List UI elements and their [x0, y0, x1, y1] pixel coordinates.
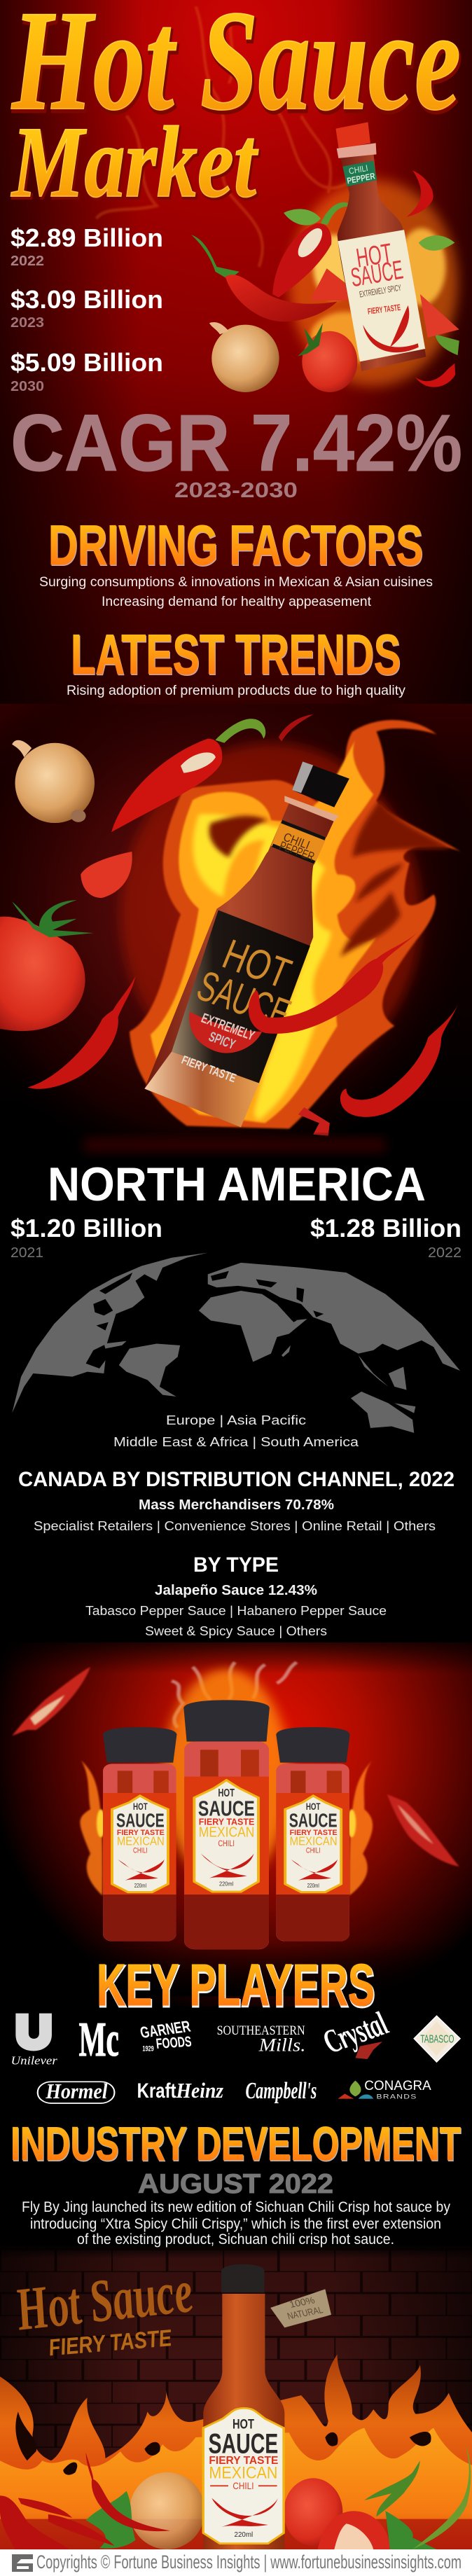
- by type section: Jalapeño Sauce 12.43%: [155, 1583, 317, 1598]
- illustration: red chilies: [0, 2453, 170, 2549]
- illustration: hero bottle: [335, 122, 426, 371]
- bottle: left: FIERY TASTE: [117, 1828, 165, 1837]
- market value stats: $2.89 Billion: [11, 223, 163, 252]
- panel: three bottles illustration: [0, 1642, 472, 2007]
- title: Market: [11, 106, 258, 219]
- illustration: left chili: [28, 976, 136, 1089]
- text: driving factors list: Surging consumptions & innovations in Mexican & Asian cuisines: [39, 575, 433, 590]
- illustration: hero bottle: HOT: [354, 237, 394, 273]
- illustration: hero bottle: EXTREMELY SPICY: [359, 282, 402, 300]
- bottle: center: SAUCE: [198, 1797, 255, 1821]
- market value stats: 2022: [11, 254, 44, 269]
- logo: Crystal: Crystal: [315, 2005, 395, 2060]
- logo: Kraft Heinz: Heinz: [176, 2078, 223, 2103]
- logo: Kraft Heinz: [137, 2078, 223, 2103]
- north america values: 2022: [428, 1245, 461, 1261]
- brand lettering on wall: Hot Sauce: [10, 2257, 198, 2343]
- blurred chili right: [387, 1794, 459, 1867]
- distribution channel section: CANADA BY DISTRIBUTION CHANNEL, 2022: [18, 1468, 454, 1491]
- market value stats: $3.09 Billion: [11, 285, 163, 314]
- bottle: center: HOT: [218, 1787, 235, 1799]
- smoke above bottles: [172, 1662, 297, 1728]
- north america values: [11, 1214, 461, 1261]
- north america values: $1.20 Billion: [11, 1214, 162, 1242]
- text: industry development body: of the existing product, Sichuan chili crisp hot sauce.: [77, 2231, 394, 2248]
- company logos: [11, 2005, 460, 2104]
- tag: 100% natural: [270, 2289, 331, 2327]
- logo: Tabasco: [414, 2016, 460, 2062]
- heading: north america: NORTH AMERICA: [48, 1158, 426, 1211]
- bottle: right: HOT: [306, 1801, 321, 1812]
- illustration: flaming bottle: SAUCE: [190, 962, 297, 1039]
- bottle: right: MEXICAN: [290, 1834, 338, 1848]
- text: driving factors list: Increasing demand for healthy appeasement: [102, 595, 372, 609]
- market value stats: 2023: [11, 315, 44, 331]
- bottle: center: MEXICAN: [199, 1824, 254, 1841]
- brand lettering on wall: [10, 2257, 198, 2361]
- illustration: hero bottle: CHILI: [348, 162, 368, 176]
- logo: Garner Foods: FOODS: [155, 2033, 193, 2052]
- panel: brick wall and flames illustration: [0, 2245, 472, 2550]
- flames: [0, 2355, 472, 2549]
- panel: logos and industry development background: [0, 2009, 472, 2249]
- logo: Garner Foods: GARNER: [138, 2017, 192, 2042]
- blurred chili left: [12, 1667, 90, 1736]
- illustration: hero bottle: SAUCE: [349, 254, 405, 293]
- distribution channel section: Specialist Retailers | Convenience Stores | Online Retail | Others: [34, 1519, 436, 1533]
- logo: Hormel: Hormel: [46, 2079, 108, 2103]
- bottle: left: CHILI: [133, 1846, 148, 1855]
- panel: north america background: [0, 1149, 472, 1646]
- logo: Unilever: Unilever: [11, 2054, 57, 2068]
- illustration: hero hot sauce bottle with chilies: [191, 122, 459, 392]
- bottle: left: HOT: [133, 1801, 148, 1812]
- brand lettering on wall: FIERY TASTE: [47, 2325, 174, 2361]
- other regions: Europe | Asia Pacific: [166, 1413, 306, 1427]
- date: august 2022: AUGUST 2022: [138, 2169, 333, 2199]
- title: [11, 0, 462, 221]
- illustration: flaming bottle: [144, 761, 349, 1128]
- illustration: cut chili: [111, 719, 265, 832]
- illustration: right chili across bottle: [249, 931, 419, 1034]
- illustration: whole tomato: [0, 900, 93, 1031]
- logo: Conagra Brands: BRANDS: [377, 2093, 416, 2100]
- CAGR callout: 2023-2030: [174, 478, 298, 502]
- bottle: left: MEXICAN: [117, 1834, 165, 1848]
- illustration: ingredients bottle: 220ml: [235, 2531, 253, 2539]
- north america values: 2021: [11, 1245, 43, 1261]
- illustration: tomato wedge: [81, 852, 132, 898]
- illustration: greens: [86, 2444, 471, 2549]
- by type section: Sweet & Spicy Sauce | Others: [145, 1624, 327, 1638]
- tag: 100% natural: 100%: [288, 2295, 317, 2310]
- illustration: ingredients bottle: FIERY TASTE: [209, 2453, 278, 2466]
- logo: Conagra Brands: [338, 2078, 431, 2100]
- flames behind bottle: [120, 720, 461, 1129]
- illustration: onion: [130, 2472, 204, 2549]
- illustration: ingredients bottle: MEXICAN: [209, 2463, 277, 2482]
- illustration: tomatoes: [284, 2478, 390, 2549]
- illustration: flaming bottle: FIERY TASTE: [180, 1053, 238, 1085]
- company logos: Mc: [79, 2012, 119, 2067]
- by type section: Tabasco Pepper Sauce | Habanero Pepper Sauce: [85, 1604, 387, 1618]
- bottle: right: SAUCE: [289, 1810, 338, 1831]
- tag: 100% natural: NATURAL: [286, 2305, 324, 2322]
- logo: Fortune Business Insights: [12, 2554, 33, 2572]
- logo: Campbell's: Campbell's: [245, 2078, 317, 2104]
- illustration: flaming bottle: EXTREMELY: [199, 1011, 257, 1044]
- illustration: ingredients bottle: [203, 2264, 284, 2549]
- bottle: left: SAUCE: [116, 1810, 165, 1831]
- logo: Southeastern Mills: [217, 2023, 305, 2055]
- logo: Kraft Heinz: Kraft: [137, 2079, 176, 2103]
- bottle: left: [103, 1727, 176, 1941]
- title: Market: [11, 106, 258, 219]
- illustration: flaming bottle: PEPPER: [277, 838, 317, 864]
- illustration: hero bottle: FIERY TASTE: [367, 302, 401, 317]
- illustration: chili fragment: [298, 1107, 330, 1136]
- logo: Southeastern Mills: SOUTHEASTERN: [217, 2023, 305, 2037]
- logo: Garner Foods: [138, 2017, 193, 2053]
- text: industry development body: introducing “Xtra Spicy Chili Crispy,” which is the first ever extension: [30, 2216, 441, 2232]
- illustration: hero bottle: PEPPER: [346, 171, 376, 186]
- bottle: right: CHILI: [306, 1846, 321, 1855]
- bottle: center: [183, 1700, 270, 1949]
- glow strip above north america: [84, 1138, 385, 1152]
- logo: Crystal: [315, 2005, 395, 2060]
- illustration: flaming bottle: CHILI: [282, 830, 312, 852]
- bottle: center: FIERY TASTE: [199, 1817, 255, 1827]
- logo: Unilever: [11, 2014, 57, 2068]
- illustration: lower right chili: [340, 1002, 459, 1117]
- illustration: ingredients bottle: HOT: [232, 2416, 254, 2432]
- logo: Southeastern Mills: Mills.: [258, 2035, 305, 2055]
- illustration: ingredients bottle: SAUCE: [209, 2428, 278, 2459]
- world globe map: [12, 1253, 460, 1433]
- logo: Conagra Brands: CONAGRA: [364, 2078, 431, 2093]
- by type section: BY TYPE: [193, 1553, 279, 1577]
- market value stats: [11, 223, 163, 394]
- bottle: center: CHILI: [218, 1838, 235, 1848]
- logo: Garner Foods: 1929: [142, 2044, 154, 2053]
- bottle: right: [276, 1727, 350, 1941]
- distribution channel section: [18, 1468, 454, 1533]
- text: driving factors list: [39, 575, 433, 609]
- fire glow around bottles: [80, 1669, 373, 1896]
- bottom red glow: [0, 2519, 472, 2549]
- bottle: left: 220ml: [134, 1883, 146, 1889]
- bottle: right: 220ml: [307, 1883, 319, 1889]
- illustration: onion: [12, 740, 95, 823]
- panel: flaming bottle illustration: [0, 704, 472, 1163]
- illustration: flaming bottle: HOT: [216, 931, 297, 998]
- illustration: ingredients bottle: CHILI: [232, 2481, 254, 2491]
- title: Market: [12, 109, 260, 221]
- other regions: Middle East & Africa | South America: [113, 1435, 359, 1449]
- market value stats: 2030: [11, 379, 44, 394]
- text: industry development body: [22, 2199, 450, 2248]
- illustration: small chili: [279, 714, 313, 742]
- bottle: right: FIERY TASTE: [290, 1828, 338, 1837]
- north america values: $1.28 Billion: [310, 1214, 461, 1242]
- distribution channel section: Mass Merchandisers 70.78%: [139, 1497, 334, 1513]
- text: latest trends: Rising adoption of premium products due to high quality: [67, 684, 406, 698]
- other regions: [113, 1413, 359, 1449]
- illustration: flaming bottle: SPICY: [207, 1030, 237, 1053]
- by type section: [85, 1553, 387, 1638]
- bottle: center: 220ml: [219, 1881, 233, 1887]
- panel: hero background: [0, 0, 472, 721]
- market value stats: $5.09 Billion: [11, 348, 163, 377]
